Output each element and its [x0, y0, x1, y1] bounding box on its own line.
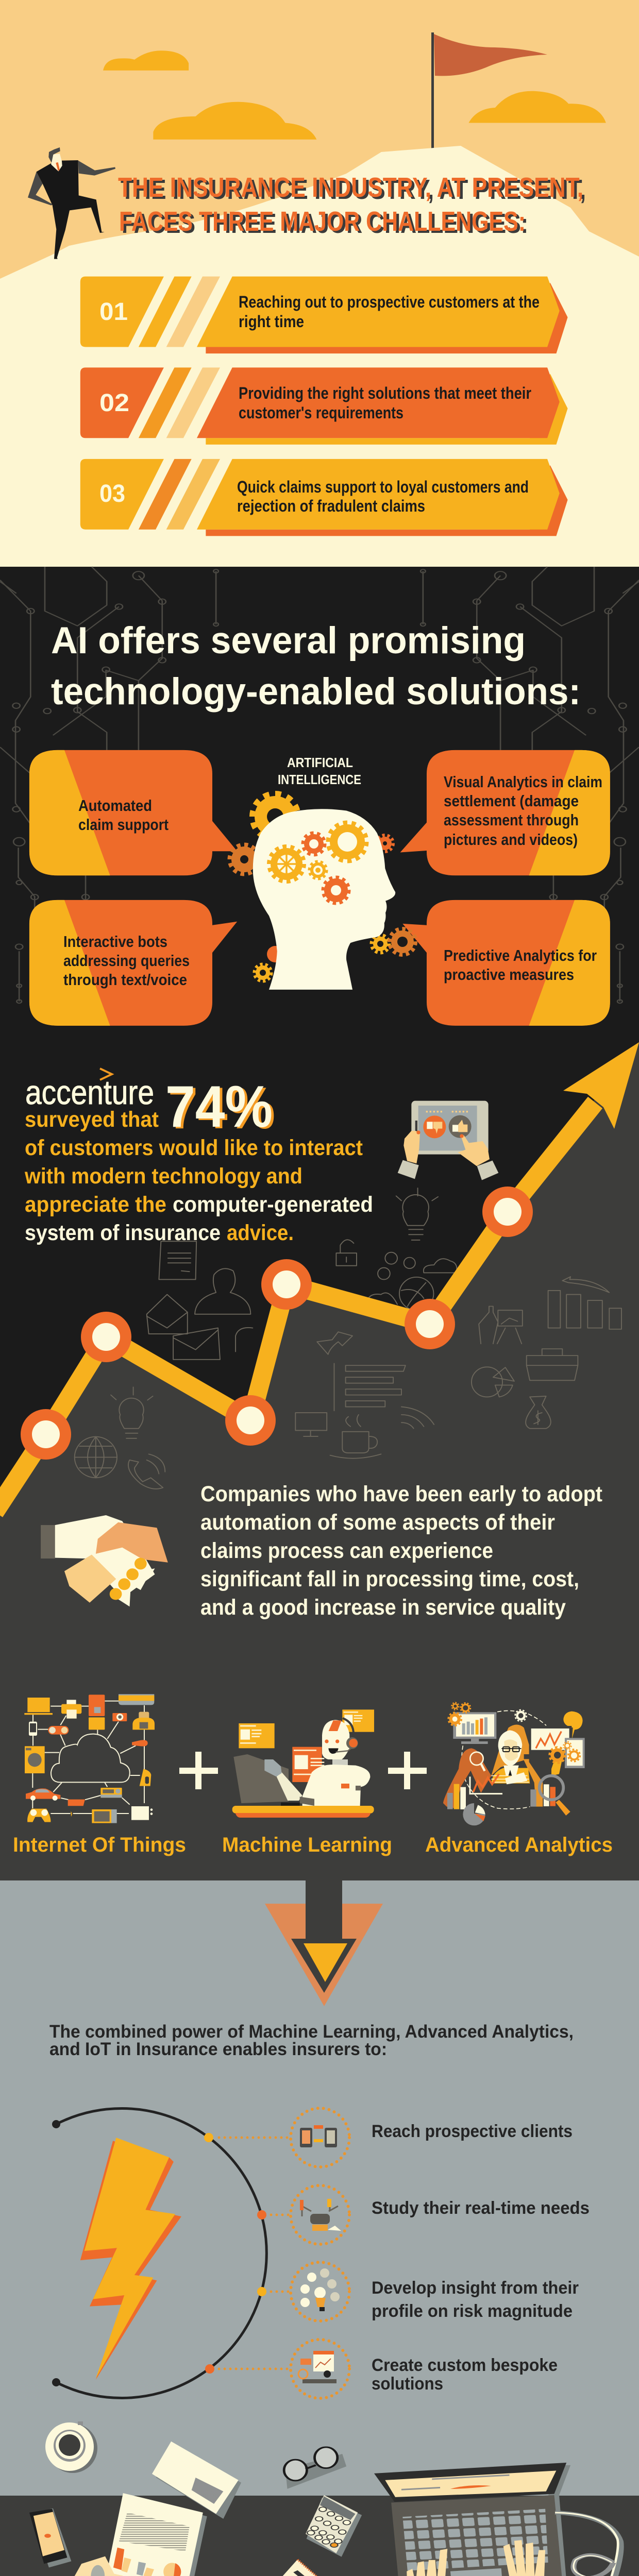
label: machine learning: Machine Learning: [222, 1834, 392, 1856]
clouds: [103, 50, 606, 140]
survey text: 74%: [168, 1076, 275, 1141]
icon: mouse and cable: [555, 2513, 620, 2576]
challenge 01: [80, 277, 568, 353]
artificial intelligence label: [278, 755, 361, 787]
item: custom bespoke solutions: solutions: [372, 2374, 443, 2394]
panel: accenture survey: [0, 1030, 639, 1654]
chart nodes: [21, 1187, 533, 1460]
doodle icons: [75, 1188, 621, 1489]
icon: document: [100, 2493, 207, 2576]
artificial intelligence label: INTELLIGENCE: [278, 772, 361, 787]
plus sign: [388, 1752, 427, 1789]
mountain: [0, 146, 639, 567]
icon: advanced analytics: [443, 1703, 585, 1825]
challenge 03: Quick claims support to loyal customers and: [237, 478, 529, 496]
panel: technologies: [0, 1649, 639, 1880]
item: custom bespoke solutions: [205, 2340, 558, 2398]
survey text: surveyed that: [25, 1107, 159, 1132]
icon: businessman: [28, 147, 115, 259]
icon: handshake: [41, 1515, 168, 1606]
callout: predictive analytics: Predictive Analytics for: [444, 946, 597, 964]
survey text: computer-generated: [173, 1192, 373, 1217]
survey text: of customers would like to interact: [25, 1136, 363, 1160]
callout: interactive bots: Interactive bots: [63, 933, 167, 951]
survey text: advice.: [227, 1221, 294, 1245]
gray background: [0, 1649, 639, 1880]
item: reach prospective clients: Reach prospective clients: [372, 2122, 573, 2141]
icon: glasses: [284, 2447, 346, 2489]
survey text: appreciate the: [25, 1192, 166, 1217]
title: [51, 620, 581, 713]
callout: visual analytics: Visual Analytics in claim: [444, 773, 602, 791]
heading: [118, 172, 586, 239]
blue-gray background: [0, 1880, 639, 2499]
arc: [52, 2108, 266, 2398]
heading: FACES THREE MAJOR CHALLENGES:: [122, 208, 528, 239]
chart line: [0, 1042, 639, 1512]
sky: [0, 0, 639, 567]
early adopters text: claims process can experience: [200, 1538, 493, 1563]
survey text: with modern technology and: [24, 1164, 302, 1189]
early adopters text: Companies who have been early to adopt: [200, 1482, 602, 1506]
callout: visual analytics: assessment through: [444, 811, 579, 829]
desk surface: [0, 2496, 639, 2576]
early adopters text: [200, 1482, 602, 1620]
intro text: and IoT in Insurance enables insurers to:: [49, 2039, 387, 2059]
icon: tablet with hands: [398, 1101, 498, 1180]
intro text: [49, 2022, 574, 2059]
title: AI offers several promising: [51, 620, 526, 662]
item: reach prospective clients: [204, 2108, 573, 2167]
panel: combined power: [0, 1880, 639, 2499]
heading: FACES THREE MAJOR CHALLENGES:: [119, 206, 526, 237]
icon: calculator: [306, 2495, 362, 2557]
callout: interactive bots: [29, 900, 237, 1026]
challenge 03: rejection of fradulent claims: [237, 497, 425, 515]
item: study real-time needs: [257, 2185, 590, 2244]
artificial intelligence label: ARTIFICIAL: [287, 755, 353, 770]
arrow: [265, 1880, 383, 2006]
gray area under the growth line: [0, 1042, 639, 1654]
panel: challenges: [0, 0, 639, 567]
item: develop insight: Develop insight from their: [372, 2278, 579, 2298]
challenge 02: Providing the right solutions that meet their: [239, 384, 531, 402]
survey text: [24, 1074, 373, 1245]
icon: flag: [431, 32, 547, 149]
challenge 03: [80, 459, 568, 536]
icon: laptop: [374, 2463, 570, 2576]
label: internet of things: Internet Of Things: [13, 1834, 186, 1856]
plus sign: [179, 1752, 218, 1789]
callout: predictive analytics: [402, 900, 610, 1026]
callout: automated claim support: Automated: [78, 796, 152, 815]
arrow head: [563, 1042, 639, 1129]
challenge 01: Reaching out to prospective customers at the: [239, 293, 540, 311]
callout: predictive analytics: proactive measures: [444, 965, 574, 984]
icon: machine learning robot: [232, 1709, 374, 1818]
icon: envelope: [152, 2442, 241, 2519]
challenge 03: 03: [99, 480, 125, 507]
label: advanced analytics: Advanced Analytics: [425, 1834, 613, 1856]
early adopters text: significant fall in processing time, cost,: [200, 1567, 579, 1591]
item: develop insight: profile on risk magnitude: [372, 2301, 573, 2321]
survey text: 74%: [165, 1074, 273, 1140]
black background: [0, 1030, 639, 1546]
survey text: system of insurance: [25, 1221, 221, 1245]
icon: left hand: [0, 2556, 123, 2576]
callout: interactive bots: through text/voice: [63, 971, 187, 989]
item: custom bespoke solutions: Create custom bespoke: [372, 2355, 558, 2375]
item: study real-time needs: Study their real-time needs: [372, 2198, 590, 2218]
challenge 02: [80, 367, 568, 445]
icon: notepad: [266, 2560, 322, 2576]
challenge 02: customer's requirements: [239, 403, 403, 422]
callout: visual analytics: pictures and videos): [444, 831, 578, 849]
panel: desk scene: [0, 2421, 639, 2576]
callout: automated claim support: [29, 750, 237, 875]
challenge 01: right time: [239, 312, 304, 331]
challenge 02: 02: [99, 389, 129, 417]
callout: visual analytics: settlement (damage: [444, 792, 579, 810]
icon: lightning bolt: [80, 2138, 181, 2380]
intro text: The combined power of Machine Learning, Advanced Analytics,: [49, 2022, 574, 2042]
item: develop insight: [257, 2262, 579, 2321]
callout: visual analytics: [400, 750, 610, 875]
early adopters text: and a good increase in service quality: [200, 1595, 566, 1620]
icon: typing hands: [406, 2540, 558, 2576]
accenture logo: accenture: [25, 1073, 154, 1111]
icon: internet of things: [24, 1694, 155, 1823]
callout: automated claim support: claim support: [78, 816, 169, 834]
icon: phone: [29, 2509, 71, 2568]
title: technology-enabled solutions:: [51, 671, 581, 713]
icon: head with gears: [230, 794, 415, 990]
dark background: [0, 567, 639, 1036]
challenge 01: 01: [99, 298, 128, 326]
icon: coffee cup: [45, 2421, 97, 2473]
panel: AI solutions: [0, 567, 639, 1036]
callout: interactive bots: addressing queries: [63, 952, 190, 970]
early adopters text: automation of some aspects of their: [200, 1510, 555, 1535]
